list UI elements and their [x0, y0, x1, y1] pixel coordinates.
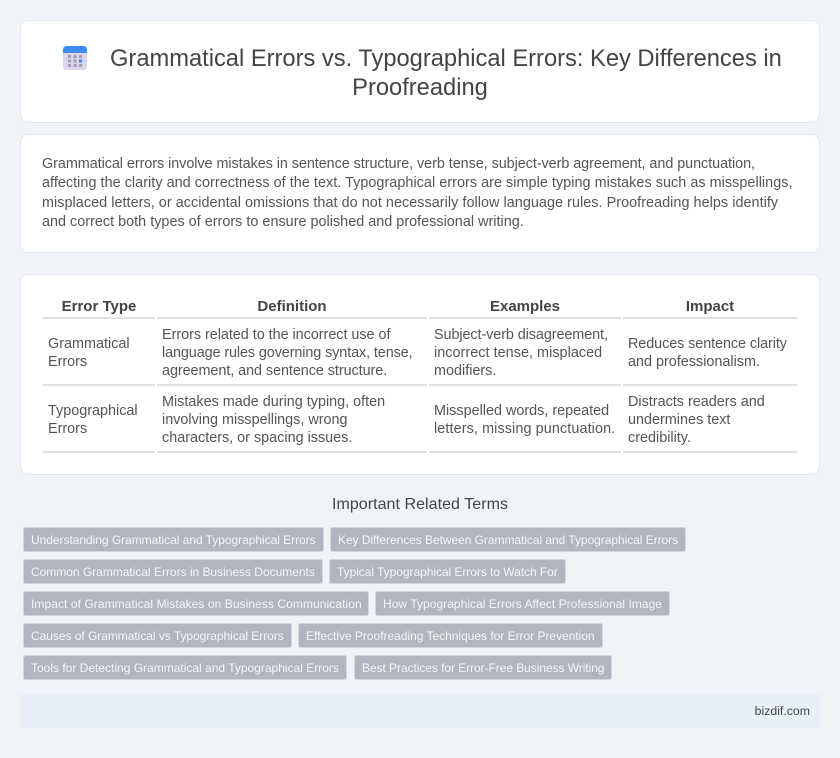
- row: typographical errors definition: characters, or spacing issues.: [162, 430, 352, 446]
- chip: Typical Typographical Errors to Watch For: [337, 565, 558, 579]
- panel: intro text: [20, 134, 820, 253]
- row: grammatical errors examples: modifiers.: [434, 363, 496, 379]
- intro paragraph: Grammatical errors involve mistakes in sentence structure, verb tense, subject-verb agreement, and punctuation,: [42, 156, 755, 172]
- title: Grammatical Errors vs. Typographical Errors: Key Differences in: [110, 46, 782, 72]
- row: typographical errors impact: undermines text: [628, 412, 730, 428]
- row: typographical errors examples: Misspelled words, repeated: [434, 403, 609, 419]
- row: typographical errors examples: [434, 403, 615, 437]
- row: typographical errors definition: [162, 394, 385, 446]
- related terms chips: [23, 527, 686, 680]
- chip: Common Grammatical Errors in Business Documents: [31, 565, 315, 579]
- chip: Key Differences Between Grammatical and Typographical Errors: [338, 533, 678, 547]
- table header: definition: Definition: [257, 298, 327, 315]
- row: typographical errors type: Errors: [48, 421, 87, 437]
- chip: [23, 591, 369, 616]
- chip: [23, 623, 292, 648]
- chip: [23, 655, 347, 680]
- footer source: bizdif.com: [755, 704, 810, 718]
- row: grammatical errors impact: Reduces sentence clarity: [628, 336, 787, 352]
- intro paragraph: [42, 156, 793, 230]
- row: typographical errors type: [48, 403, 138, 437]
- row: grammatical errors examples: [434, 327, 608, 379]
- chip: [298, 623, 603, 648]
- chip: Tools for Detecting Grammatical and Typographical Errors: [31, 661, 339, 675]
- title: Proofreading: [352, 75, 488, 101]
- header panel: [20, 20, 820, 123]
- chip: Best Practices for Error-Free Business Writing: [362, 661, 604, 675]
- table header: impact: Impact: [686, 298, 734, 315]
- chip: [23, 527, 324, 552]
- row: typographical errors impact: [628, 394, 765, 446]
- footer bar: [20, 694, 820, 728]
- row: grammatical errors definition: [162, 327, 413, 379]
- row: grammatical errors impact: and professionalism.: [628, 354, 760, 370]
- chip: [23, 559, 323, 584]
- chip: Causes of Grammatical vs Typographical Errors: [31, 629, 284, 643]
- row: typographical errors type: Typographical: [48, 403, 138, 419]
- intro paragraph: and correct both types of errors to ensure polished and professional writing.: [42, 214, 524, 230]
- chip: Impact of Grammatical Mistakes on Business Communication: [31, 597, 362, 611]
- intro paragraph: affecting the clarity and correctness of the text. Typographical errors are simple typing mistakes such as misspellings,: [42, 175, 793, 191]
- row: grammatical errors type: Grammatical: [48, 336, 130, 352]
- panel: comparison table: [20, 274, 820, 475]
- chip: Effective Proofreading Techniques for Error Prevention: [306, 629, 595, 643]
- icon: calendar: [63, 46, 87, 70]
- row: grammatical errors type: [48, 336, 130, 370]
- row: typographical errors impact: Distracts readers and: [628, 394, 765, 410]
- intro paragraph: misplaced letters, or accidental omissions that do not necessarily follow language rules. Proofreading helps identify: [42, 195, 778, 211]
- chip: How Typographical Errors Affect Professional Image: [383, 597, 662, 611]
- row: grammatical errors examples: Subject-verb disagreement,: [434, 327, 608, 343]
- row: grammatical errors definition: language rules governing syntax, tense,: [162, 345, 413, 361]
- row: grammatical errors type: Errors: [48, 354, 87, 370]
- comparison table: [43, 298, 797, 453]
- row: typographical errors definition: Mistakes made during typing, often: [162, 394, 385, 410]
- row: grammatical errors examples: incorrect tense, misplaced: [434, 345, 602, 361]
- row: grammatical errors impact: [628, 336, 787, 370]
- title: [110, 46, 782, 101]
- chip: [354, 655, 612, 680]
- chip: [375, 591, 670, 616]
- table header: error type: Error Type: [62, 298, 136, 315]
- chip: Understanding Grammatical and Typographical Errors: [31, 533, 316, 547]
- chip: [330, 527, 686, 552]
- heading: important related terms: Important Related Terms: [332, 496, 508, 513]
- row: typographical errors definition: involving misspellings, wrong: [162, 412, 348, 428]
- row: typographical errors examples: letters, missing punctuation.: [434, 421, 615, 437]
- table header: examples: Examples: [490, 298, 560, 315]
- chip: [329, 559, 566, 584]
- row: grammatical errors definition: Errors related to the incorrect use of: [162, 327, 390, 343]
- row: typographical errors impact: credibility.: [628, 430, 691, 446]
- row: grammatical errors definition: agreement, and sentence structure.: [162, 363, 387, 379]
